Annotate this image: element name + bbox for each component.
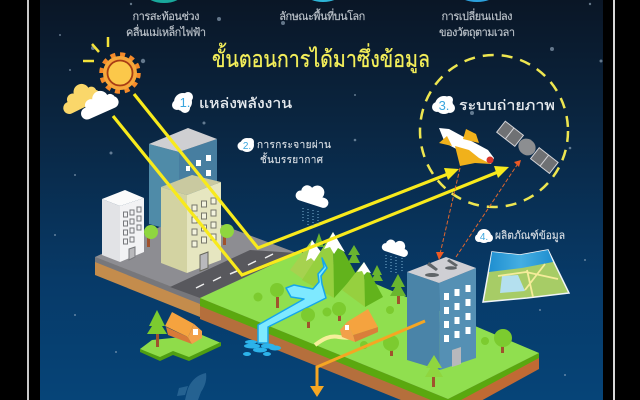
icon: white cloud xyxy=(75,85,121,121)
icon: yellow cloud xyxy=(56,78,102,116)
icon: small tree xyxy=(147,310,167,347)
path on grass xyxy=(315,336,353,345)
text: change over time: ของวัตถุตามเวลา xyxy=(439,27,515,39)
cloud with rain near station xyxy=(381,236,411,273)
step 4 label xyxy=(475,229,565,243)
energy rays xyxy=(113,94,498,275)
icon: airplane xyxy=(439,128,494,166)
text: earth surface characteristics: ลักษณะพื้นที่บนโลก xyxy=(279,8,365,23)
road xyxy=(170,250,297,298)
step 2 label xyxy=(238,138,331,166)
icon: small house xyxy=(165,312,202,344)
top icon arcs xyxy=(146,0,495,3)
step 1 label xyxy=(172,92,292,113)
small island xyxy=(140,310,221,361)
data link arrows xyxy=(440,162,519,257)
building: white block xyxy=(102,190,144,262)
tree in front of station xyxy=(425,355,443,387)
city block platform xyxy=(95,213,297,317)
step 3 label: ระบบถ่ายภาพ xyxy=(459,97,555,113)
decorative rocket watermark xyxy=(177,373,206,400)
text: electromagnetic reflectance: คลื่นแม่เหล็กไฟฟ้า xyxy=(126,24,206,39)
satellite dishes xyxy=(425,259,458,277)
dashed sensor circle xyxy=(420,55,568,207)
step 1 label: แหล่งพลังงาน xyxy=(199,95,292,111)
building: beige tower xyxy=(161,175,221,273)
building: receiving station xyxy=(407,257,476,370)
cloud with rain xyxy=(294,180,333,226)
river and waterfall xyxy=(243,258,327,356)
icon: satellite xyxy=(496,120,559,174)
step 1 label: 1. xyxy=(180,95,190,110)
trees by the city xyxy=(144,224,234,247)
pine trees behind mountains xyxy=(314,233,406,304)
step 2 label: การกระจายผ่าน xyxy=(257,140,331,151)
step 2 label: 2. xyxy=(243,141,251,152)
building: blue tower xyxy=(149,128,217,232)
land block: green island xyxy=(200,252,539,400)
step 3 label xyxy=(432,96,555,114)
text: electromagnetic reflectance: การสะท้อนช่วง xyxy=(132,11,200,23)
mountains xyxy=(290,232,383,307)
trees on island xyxy=(254,283,512,356)
step 2 label: ชั้นบรรยากาศ xyxy=(260,152,324,166)
icon: map xyxy=(483,250,569,302)
step 4 label: 4. xyxy=(480,232,488,243)
title: ขั้นตอนการได้มาซึ่งข้อมูล xyxy=(212,43,430,73)
text: change over time: การเปลี่ยนแปลง xyxy=(442,8,512,23)
step 3 label: 3. xyxy=(439,98,449,113)
arrowheads xyxy=(444,166,509,180)
house on main island xyxy=(340,309,378,342)
orange output arrow xyxy=(310,321,425,397)
icon: sun xyxy=(83,37,138,92)
step 4 label: ผลิตภัณฑ์ข้อมูล xyxy=(495,229,565,242)
